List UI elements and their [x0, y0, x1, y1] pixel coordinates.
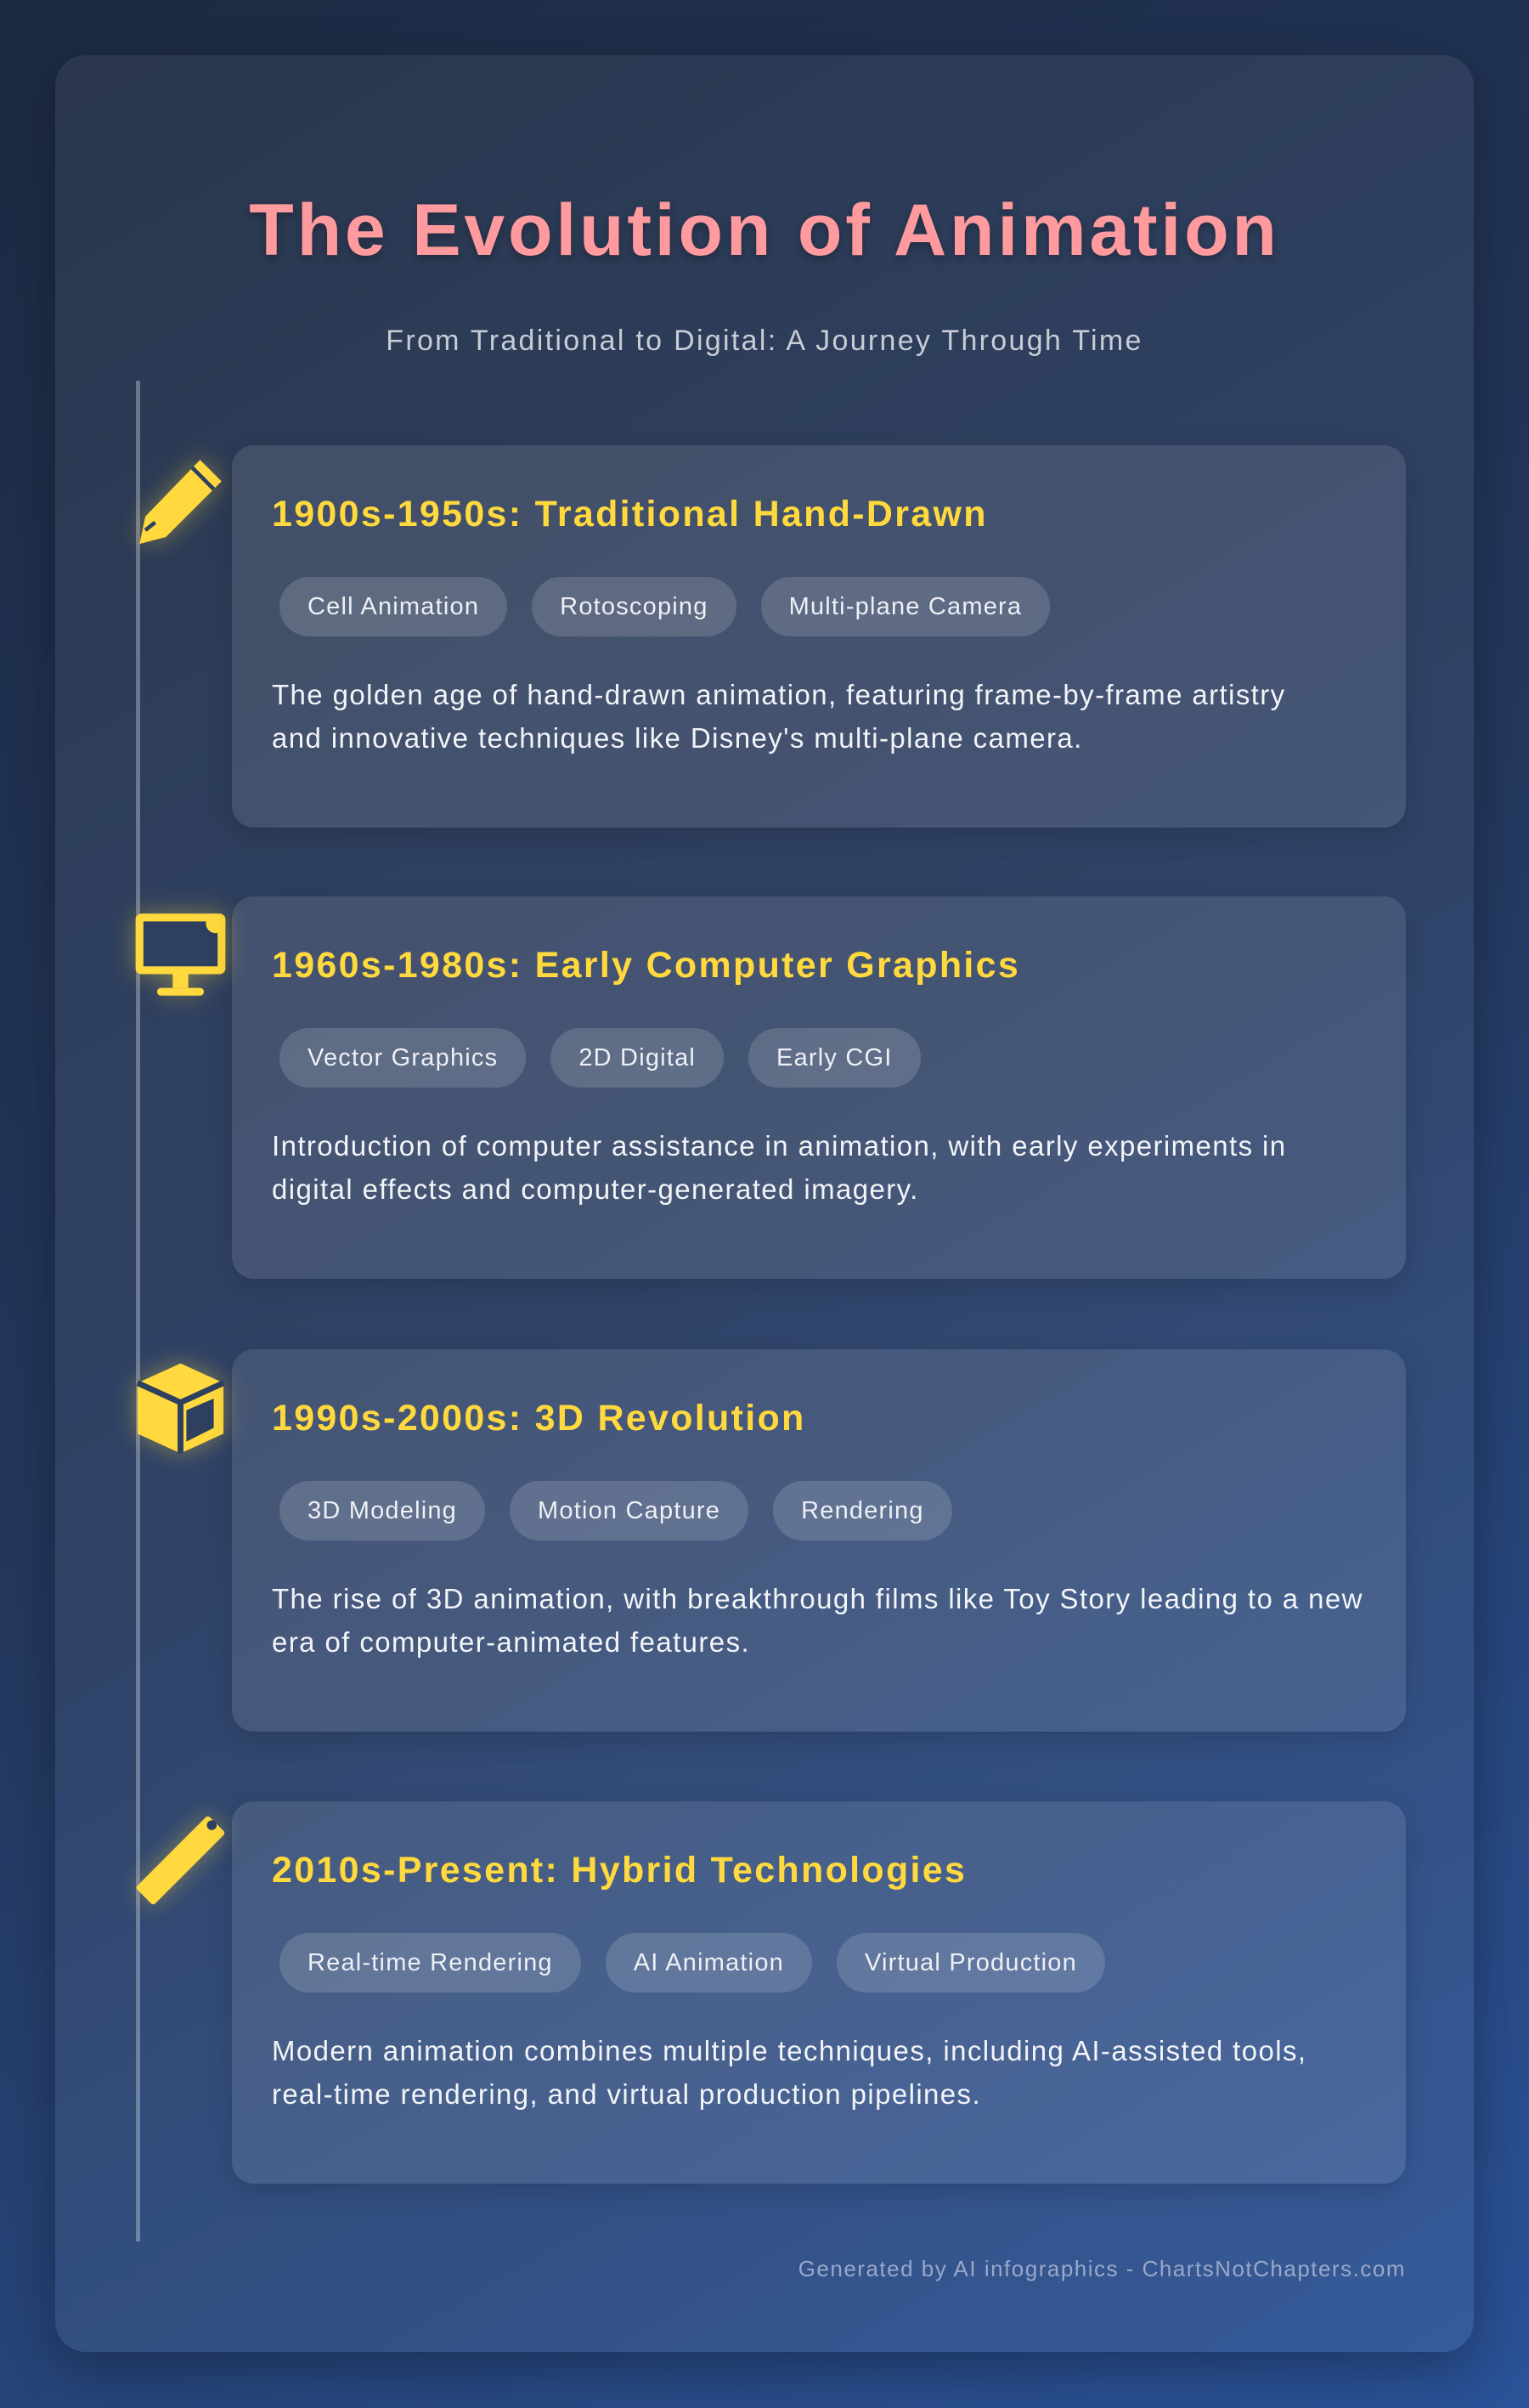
tags: Rotoscoping [560, 593, 708, 620]
heading: 1990s-2000s: 3D Revolution [272, 1398, 806, 1439]
tags: Real-time Rendering [307, 1949, 553, 1976]
description: The rise of 3D animation, with breakthrough films like Toy Story leading to a new [272, 1583, 1363, 1614]
description [272, 679, 1286, 754]
icon: wand [129, 1808, 232, 1912]
icon: cube [124, 1353, 237, 1463]
panel: 1960s [232, 896, 1406, 1279]
timeline line [136, 381, 140, 2241]
title: The Evolution of Animation [249, 189, 1280, 271]
heading: 1900s-1950s: Traditional Hand-Drawn [272, 494, 988, 534]
tags: AI Animation [634, 1949, 784, 1976]
tags [279, 1481, 952, 1540]
icon: pencil [129, 452, 229, 553]
tags [279, 577, 1050, 636]
description: The golden age of hand-drawn animation, featuring frame-by-frame artistry [272, 679, 1286, 710]
footer: Generated by AI infographics - ChartsNotChapters.com [798, 2256, 1406, 2281]
description: and innovative techniques like Disney's multi-plane camera. [272, 722, 1083, 754]
description: Introduction of computer assistance in animation, with early experiments in [272, 1130, 1287, 1162]
description: digital effects and computer-generated imagery. [272, 1173, 919, 1205]
description [272, 1130, 1287, 1205]
panel: 1900s [232, 445, 1406, 828]
tags: Vector Graphics [307, 1044, 498, 1071]
heading: 1960s-1980s: Early Computer Graphics [272, 945, 1020, 986]
description [272, 2035, 1306, 2110]
description: real-time rendering, and virtual production pipelines. [272, 2078, 981, 2110]
tags: Early CGI [776, 1044, 893, 1071]
icon: monitor [121, 899, 239, 1009]
description: Modern animation combines multiple techniques, including AI-assisted tools, [272, 2035, 1306, 2066]
description: era of computer-animated features. [272, 1626, 750, 1658]
tags: Virtual Production [865, 1949, 1077, 1976]
tags: Cell Animation [307, 593, 479, 620]
tags: 2D Digital [578, 1044, 696, 1071]
tags: Multi-plane Camera [789, 593, 1022, 620]
panel: 2010s [232, 1801, 1406, 2184]
tags [279, 1933, 1105, 1993]
subtitle: From Traditional to Digital: A Journey Through Time [386, 325, 1143, 357]
tags: 3D Modeling [307, 1497, 457, 1524]
description [272, 1583, 1363, 1658]
tags [279, 1028, 921, 1088]
tags: Rendering [801, 1497, 924, 1524]
panel: 1990s [232, 1349, 1406, 1732]
tags: Motion Capture [538, 1497, 720, 1524]
heading: 2010s-Present: Hybrid Technologies [272, 1850, 967, 1891]
